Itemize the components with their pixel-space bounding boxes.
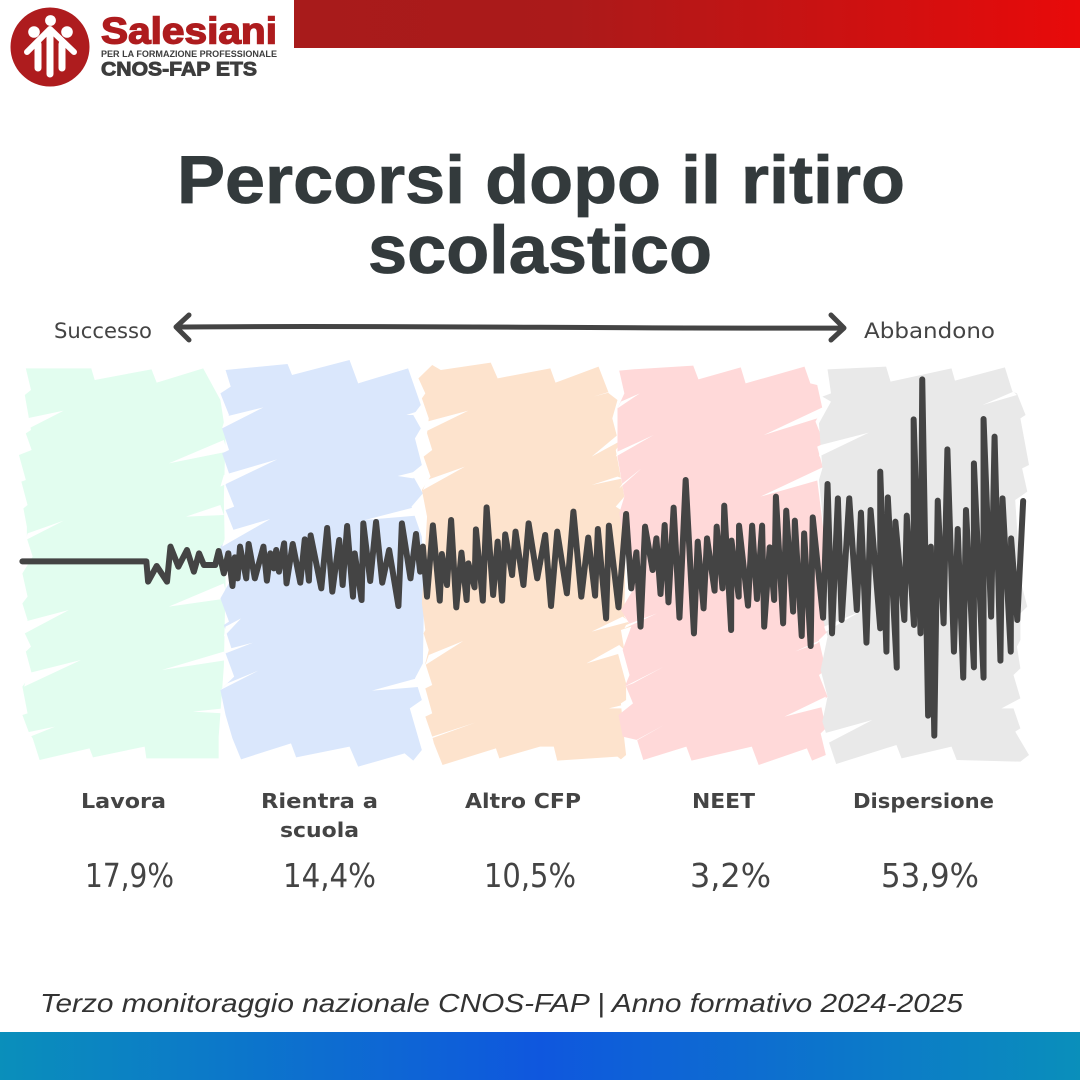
panel: NEET colour patch <box>616 366 828 765</box>
panel: Dispersione colour patch <box>819 367 1029 764</box>
column: Lavora <box>81 789 174 895</box>
waveform line <box>22 379 1023 736</box>
double arrow <box>176 315 844 340</box>
column: Altro CFP: 10,5% <box>484 856 576 895</box>
column: Altro CFP: Altro CFP <box>465 789 581 813</box>
column: Altro CFP <box>465 789 581 895</box>
icon: Salesiani emblem <box>10 8 90 86</box>
panel: Rientra a scuola colour patch <box>220 360 424 767</box>
panel: Lavora colour patch <box>19 368 227 760</box>
logo <box>10 8 277 86</box>
column: Lavora: 17,9% <box>85 856 174 895</box>
title: scolastico <box>368 212 712 288</box>
column: Rientra a scuola: scuola <box>280 818 359 842</box>
title: Percorsi dopo il ritiro <box>177 142 905 218</box>
column: Rientra a scuola: Rientra a <box>261 789 378 813</box>
title <box>177 142 905 288</box>
panel: Altro CFP colour patch <box>418 363 631 765</box>
logo wordmark: Salesiani <box>101 10 277 52</box>
scale label: Abbandono: Abbandono <box>864 319 995 343</box>
column: NEET <box>690 789 771 895</box>
scale label: Successo: Successo <box>54 319 152 343</box>
column: NEET: NEET <box>692 789 755 813</box>
column: Lavora: Lavora <box>81 789 166 813</box>
logo subtitle: PER LA FORMAZIONE PROFESSIONALE <box>101 49 277 60</box>
column: Dispersione: 53,9% <box>881 856 979 895</box>
column: NEET: 3,2% <box>690 856 771 895</box>
footer bar <box>0 1032 1080 1080</box>
source footer: Terzo monitoraggio nazionale CNOS-FAP | Anno formativo 2024-2025 <box>40 988 964 1018</box>
column: Dispersione: Dispersione <box>853 789 994 813</box>
column: Rientra a scuola: 14,4% <box>283 856 376 895</box>
column: Dispersione <box>853 789 994 895</box>
logo organisation name: CNOS-FAP ETS <box>101 58 257 80</box>
column: Rientra a scuola <box>261 789 378 895</box>
header bar <box>294 0 1080 48</box>
